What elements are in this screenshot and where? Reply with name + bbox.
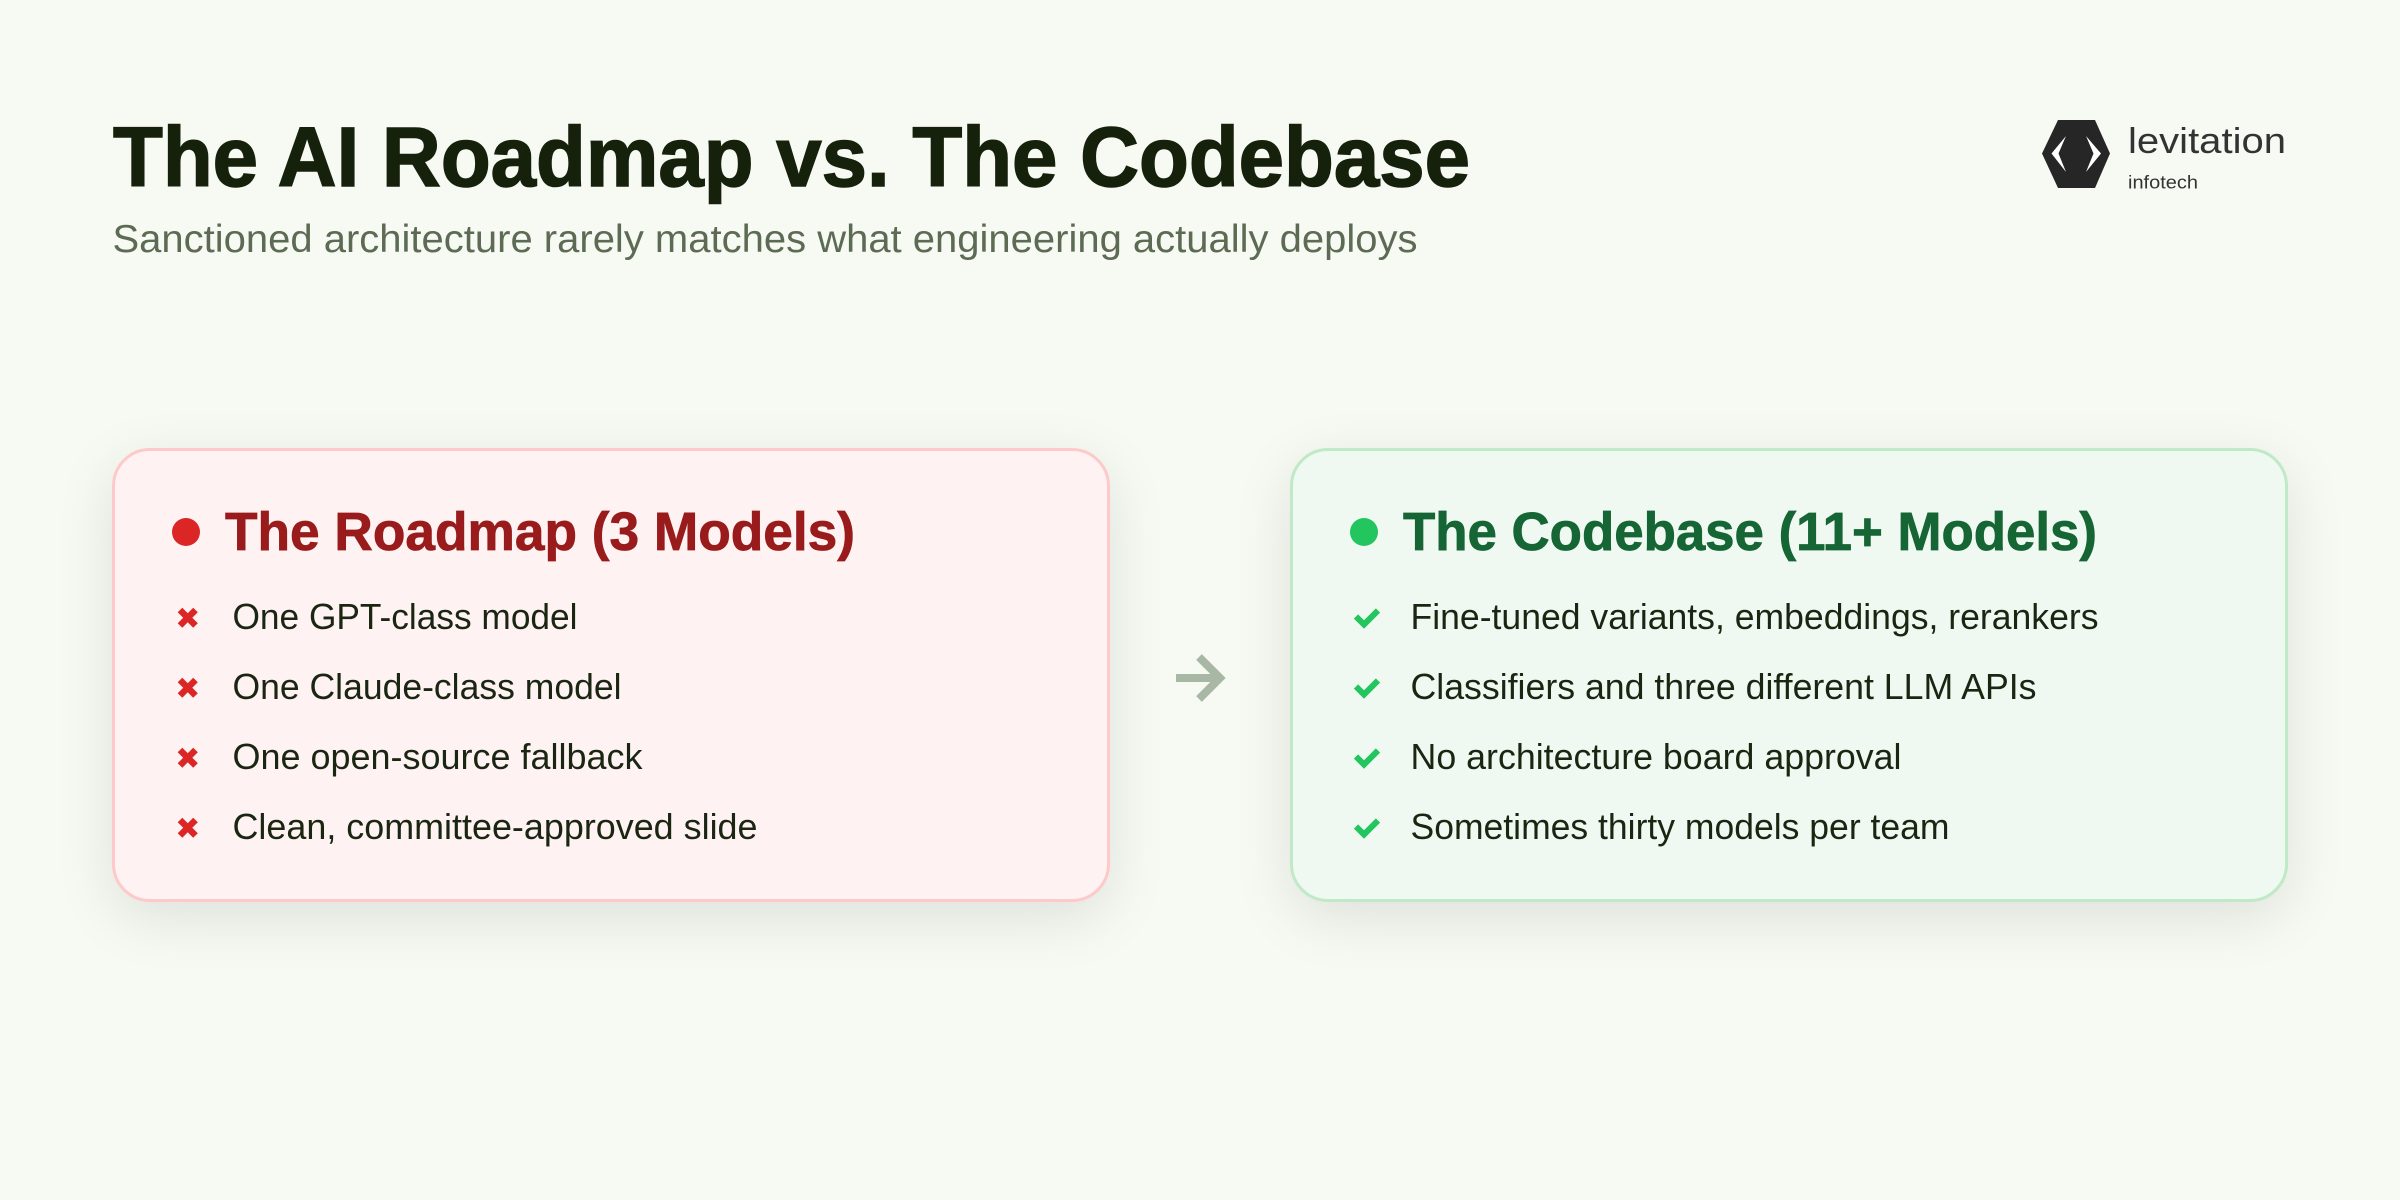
icon: hexagon with chevrons — [2042, 120, 2110, 188]
logo wordmark: levitation — [2128, 120, 2286, 161]
heading: the codebase: The Codebase (11+ Models) — [1402, 502, 2096, 562]
list item: GPT-class: One GPT-class model — [232, 596, 577, 636]
heading: the roadmap: The Roadmap (3 Models) — [224, 502, 854, 562]
logo: levitation infotech — [2042, 120, 2286, 192]
arrow — [1176, 654, 1226, 702]
title: The AI Roadmap vs. The Codebase — [113, 110, 1470, 204]
panel: the codebase — [1290, 448, 2288, 902]
status dot: red — [172, 518, 200, 546]
list item: open-source: One open-source fallback — [232, 736, 643, 776]
list item: committee slide: Clean, committee-approved slide — [232, 806, 757, 846]
list item: fine-tuned variants: Fine-tuned variants, embeddings, rerankers — [1410, 596, 2098, 636]
list item: no approval: No architecture board approval — [1410, 736, 1901, 776]
panel: the roadmap — [112, 448, 1110, 902]
subtitle: Sanctioned architecture rarely matches what engineering actually deploys — [112, 218, 1417, 261]
list item: Claude-class: One Claude-class model — [232, 666, 621, 706]
list item: thirty models: Sometimes thirty models per team — [1410, 806, 1949, 846]
list item: classifiers: Classifiers and three different LLM APIs — [1410, 666, 2036, 706]
logo tagline: infotech — [2128, 172, 2198, 192]
status dot: green — [1350, 518, 1378, 546]
